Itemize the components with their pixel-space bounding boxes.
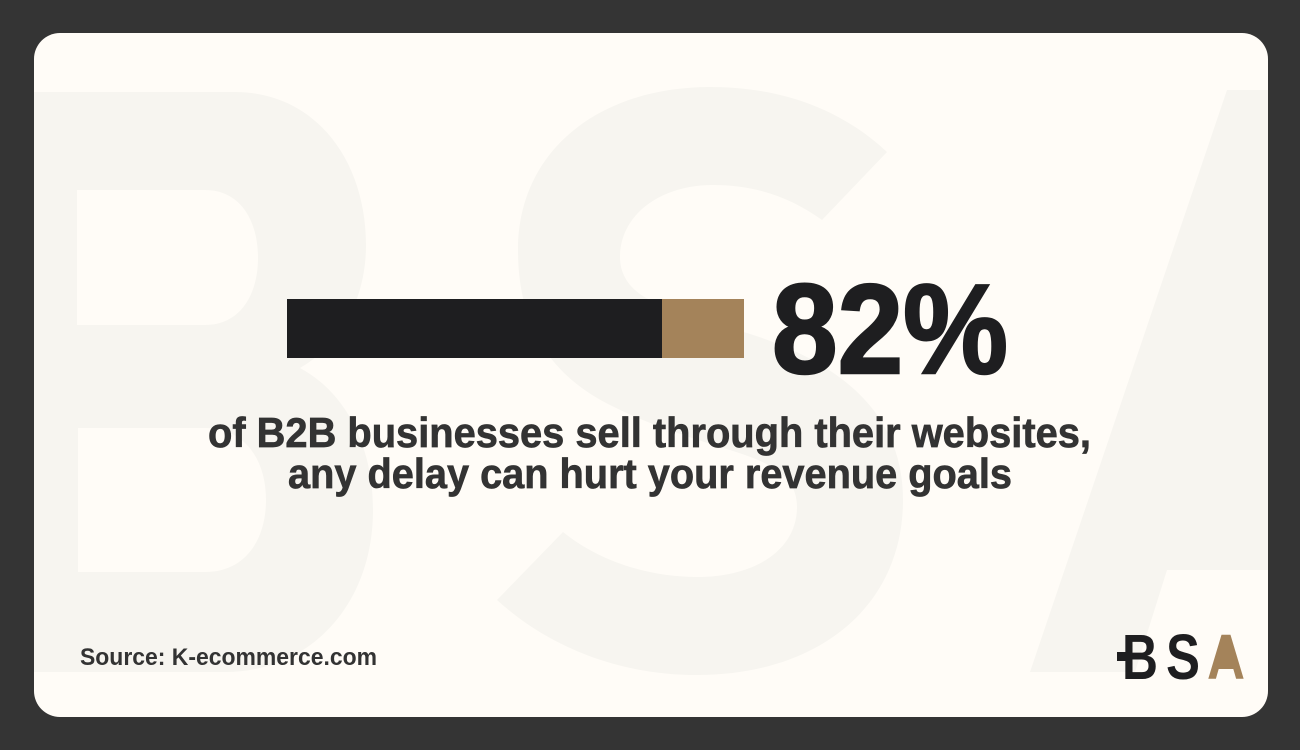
logo: BSA: A	[1207, 621, 1245, 693]
logo: BSA	[1117, 621, 1245, 693]
heading text	[208, 409, 1091, 497]
logo: BSA: S	[1166, 621, 1200, 693]
bar chart: 82 percent progress bar	[287, 299, 744, 358]
bar segment: gold	[662, 299, 744, 358]
heading text: of B2B businesses sell through their websites,	[208, 409, 1091, 456]
heading text: any delay can hurt your revenue goals	[288, 450, 1012, 497]
logo: BSA: B	[1122, 621, 1158, 693]
bar segment: dark	[287, 299, 662, 358]
big number: 82%: 82%	[772, 258, 1008, 400]
watermark: BSA background letters	[20, 87, 1290, 675]
source note: Source: K-ecommerce.com	[80, 644, 377, 671]
